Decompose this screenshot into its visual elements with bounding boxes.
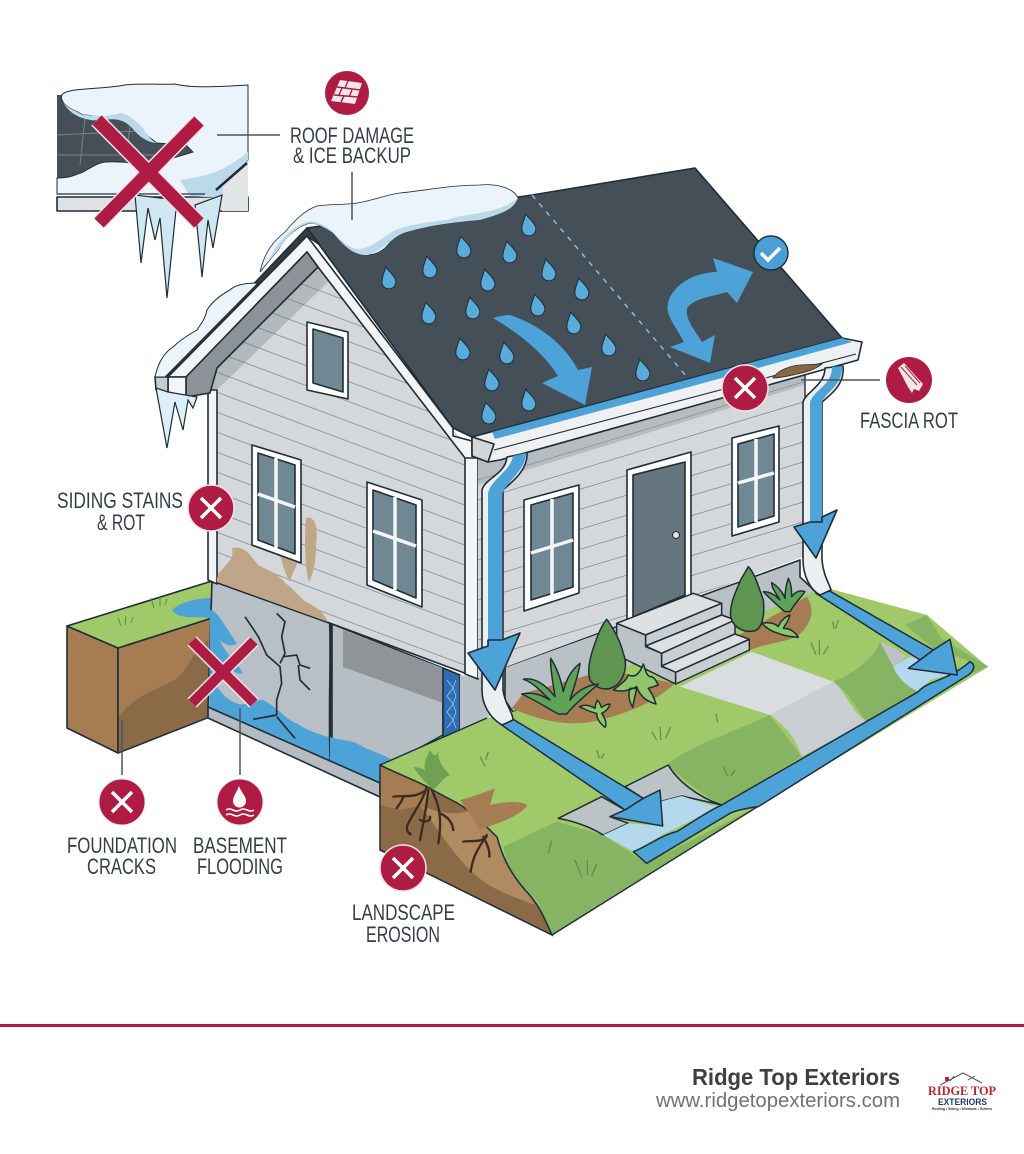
label: landscape erosion: LANDSCAPE [352, 900, 455, 925]
fascia rot x badge [722, 365, 768, 411]
curved flow arrow down the roof [493, 315, 592, 405]
label: roof damage: & ICE BACKUP [293, 143, 411, 168]
fascia rot patch [773, 364, 822, 378]
main lawn [380, 588, 988, 935]
footer logo: Roofing • Siding • Windows • Gutters [932, 1107, 992, 1111]
label: foundation cracks [67, 833, 177, 879]
label: foundation cracks: CRACKS [87, 854, 156, 879]
gutter along the eave [472, 338, 862, 462]
foundation footing [208, 707, 380, 797]
front door [627, 452, 691, 620]
right foundation [505, 560, 817, 712]
label: landscape erosion: EROSION [366, 922, 440, 947]
label: roof damage [290, 123, 414, 168]
tree roots [393, 787, 489, 872]
diverted flow arrow [667, 258, 753, 363]
foundation red X [192, 641, 254, 703]
landscape x badge [380, 845, 426, 891]
label: siding stains: & ROT [97, 510, 145, 535]
footer company name and url: Ridge Top Exteriors [692, 1064, 900, 1090]
icon: water drop and waves [217, 779, 263, 825]
dashed ridge divider [532, 195, 687, 377]
label: roof damage: ROOF DAMAGE [290, 123, 414, 148]
roof snow cap [260, 185, 518, 272]
check badge [754, 236, 788, 270]
gable siding wall [212, 268, 464, 674]
lawn outlines, darker slopes, walkway and channels [480, 589, 988, 935]
label: basement flooding: FLOODING [197, 854, 283, 879]
footer logo: EXTERIORS [938, 1097, 987, 1107]
lawn edge outline [380, 718, 757, 935]
label: basement flooding: BASEMENT [193, 833, 287, 858]
footer rule [0, 1024, 1024, 1027]
icon: rotted board [886, 357, 932, 403]
gable rake trim and soffit [155, 228, 478, 458]
front window right [732, 426, 779, 536]
footer logo: RIDGE TOP [928, 1083, 996, 1098]
label: foundation cracks: FOUNDATION [67, 833, 177, 858]
roof [307, 168, 842, 437]
garden beds, steps and plants [512, 567, 811, 727]
label: fascia rot: FASCIA ROT [860, 408, 958, 433]
label: siding stains: SIDING STAINS [57, 488, 183, 513]
inset red X [97, 120, 199, 223]
plant on erosion edge [413, 750, 450, 790]
far downspout [803, 366, 843, 595]
siding stains and rot [217, 518, 328, 622]
far downspout arrow [794, 510, 837, 558]
inset panel: ice dam close-up [57, 84, 248, 298]
footer company name and url: www.ridgetopexteriors.com [655, 1090, 900, 1112]
label: basement flooding [193, 833, 287, 879]
left soil cutaway block [67, 581, 212, 753]
siding x badge [188, 485, 234, 531]
label: siding stains [57, 488, 183, 535]
corner trims [208, 390, 478, 679]
near downspout arrow [468, 633, 520, 690]
right siding wall [478, 372, 810, 680]
gable attic window [307, 322, 348, 399]
eave icicles [156, 388, 197, 448]
icon: roof shingles [325, 71, 369, 115]
near downspout [482, 453, 527, 725]
snow on left rake [155, 283, 258, 377]
footer company name and url [655, 1064, 900, 1112]
front soil erosion cutaway [380, 765, 552, 935]
front window left [524, 485, 579, 611]
foundation wall with cracks [208, 581, 342, 762]
raindrops [379, 213, 651, 425]
leader lines [122, 135, 880, 775]
gable window right [367, 482, 422, 607]
label: landscape erosion [352, 900, 455, 947]
gable window left [252, 445, 301, 563]
footer logo [928, 1073, 996, 1111]
foundation x badge [99, 779, 145, 825]
basement interior [330, 624, 505, 783]
